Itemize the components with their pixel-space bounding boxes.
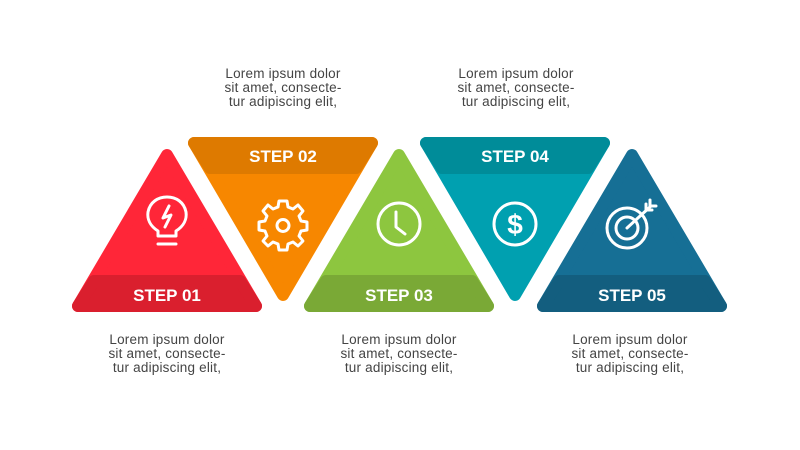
text: step 03 description: sit amet, consecte-	[340, 346, 458, 361]
text: step 05 description: sit amet, consecte-	[571, 346, 689, 361]
text: step 05 description: tur adipiscing elit,	[576, 360, 684, 375]
text: step 01 description: Lorem ipsum dolor	[109, 332, 225, 347]
text: step 01 description	[108, 332, 226, 375]
step 04: teal triangle: STEP 04	[481, 147, 549, 166]
icon: dollar	[494, 203, 536, 245]
text: step 04 description	[457, 66, 575, 109]
text: step 02 description	[224, 66, 342, 109]
text: step 05 description: Lorem ipsum dolor	[572, 332, 688, 347]
step 02: orange triangle: STEP 02	[249, 147, 317, 166]
text: step 03 description	[340, 332, 458, 375]
text: step 04 description: Lorem ipsum dolor	[458, 66, 574, 81]
text: step 02 description: Lorem ipsum dolor	[225, 66, 341, 81]
step 03: green triangle	[310, 155, 488, 306]
icon: light bulb	[148, 197, 186, 244]
text: step 01 description: sit amet, consecte-	[108, 346, 226, 361]
step 05: blue triangle: STEP 05	[598, 286, 666, 305]
text: step 01 description: tur adipiscing elit,	[113, 360, 221, 375]
text: step 05 description	[571, 332, 689, 375]
step 05: blue triangle	[543, 155, 721, 306]
step 02: orange triangle	[194, 143, 372, 295]
text: step 04 description: tur adipiscing elit,	[462, 94, 570, 109]
step 04: teal triangle	[426, 143, 604, 295]
icon: clock	[378, 203, 420, 245]
text: step 03 description: Lorem ipsum dolor	[341, 332, 457, 347]
text: step 02 description: tur adipiscing elit,	[229, 94, 337, 109]
icon: dollar: $	[507, 209, 523, 240]
text: step 04 description: sit amet, consecte-	[457, 80, 575, 95]
icon: gear	[259, 201, 307, 250]
text: step 02 description: sit amet, consecte-	[224, 80, 342, 95]
text: step 03 description: tur adipiscing elit,	[345, 360, 453, 375]
step 01: red triangle: STEP 01	[133, 286, 201, 305]
step 03: green triangle: STEP 03	[365, 286, 433, 305]
icon: target	[607, 200, 656, 248]
step 01: red triangle	[78, 155, 256, 306]
